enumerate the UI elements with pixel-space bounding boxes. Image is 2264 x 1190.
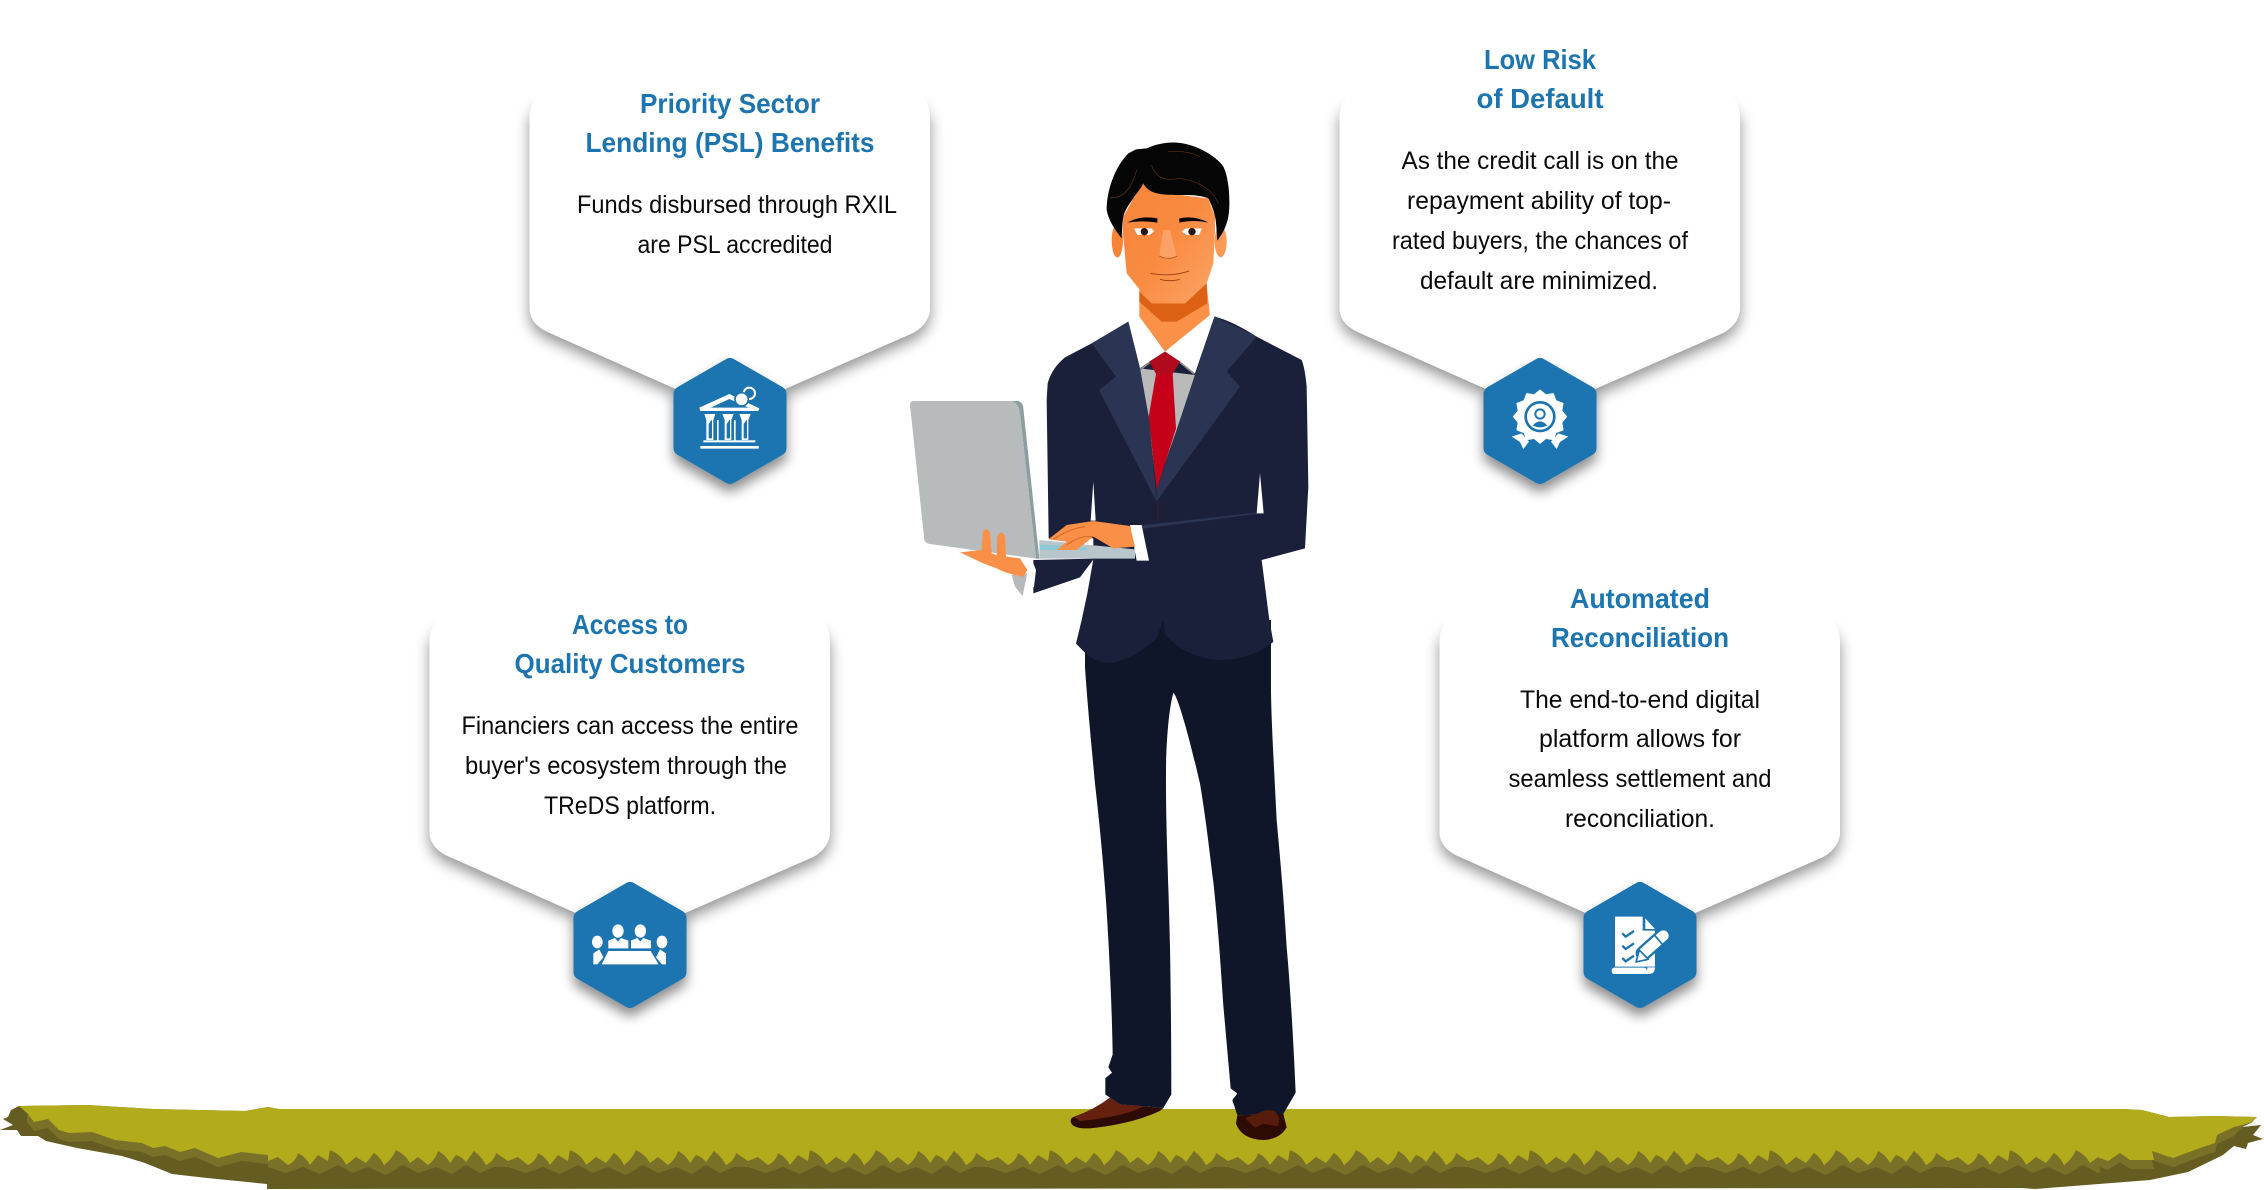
sleeve and cuffs xyxy=(1012,573,1027,596)
ground: grass strip xyxy=(0,1105,2263,1189)
text block: default are minimized. xyxy=(1420,267,1658,295)
icon: checklist and pencil xyxy=(1612,917,1663,974)
heading: Access to xyxy=(572,609,688,640)
heading: of Default xyxy=(1476,83,1604,114)
text block: Funds disbursed through RXIL xyxy=(577,191,897,219)
jacket hem xyxy=(1076,620,1273,663)
heading: Lending (PSL) Benefits xyxy=(586,127,874,158)
hands xyxy=(960,529,1027,577)
lapels xyxy=(1092,317,1257,502)
icon: bank with coins xyxy=(699,388,759,449)
upper body xyxy=(910,143,1308,620)
text block: buyer's ecosystem through the xyxy=(465,752,787,780)
heading: Low Risk xyxy=(1484,44,1596,75)
text block: repayment ability of top- xyxy=(1407,187,1671,215)
text block: As the credit call is on the xyxy=(1402,147,1678,175)
panel: access to quality customers xyxy=(405,579,855,1000)
icon: award badge xyxy=(1512,391,1568,449)
hair xyxy=(1107,143,1229,241)
text block: reconciliation. xyxy=(1565,805,1715,833)
text block: platform allows for xyxy=(1539,725,1741,753)
illustration: businessman with laptop xyxy=(910,143,1308,1140)
eyes and mouth xyxy=(1127,217,1208,223)
text block: Financiers can access the entire xyxy=(462,712,798,740)
text block: are PSL accredited xyxy=(638,231,832,259)
heading: Priority Sector xyxy=(640,88,820,119)
panel: automated reconciliation xyxy=(1415,579,1865,1000)
heading: Reconciliation xyxy=(1551,622,1729,653)
text block: The end-to-end digital xyxy=(1520,686,1760,714)
text block: seamless settlement and xyxy=(1508,765,1772,793)
neck and face xyxy=(1139,283,1210,352)
panel: priority sector lending xyxy=(505,55,955,476)
shirt and tie xyxy=(1140,368,1195,487)
trousers and shoes xyxy=(1071,620,1296,1140)
heading: Automated xyxy=(1570,583,1710,614)
panel: low risk of default xyxy=(1315,44,1765,476)
text block: TReDS platform. xyxy=(544,792,716,820)
icon: meeting table xyxy=(592,924,667,964)
laptop xyxy=(1039,540,1135,559)
text block: rated buyers, the chances of xyxy=(1392,227,1688,255)
heading: Quality Customers xyxy=(514,648,746,679)
